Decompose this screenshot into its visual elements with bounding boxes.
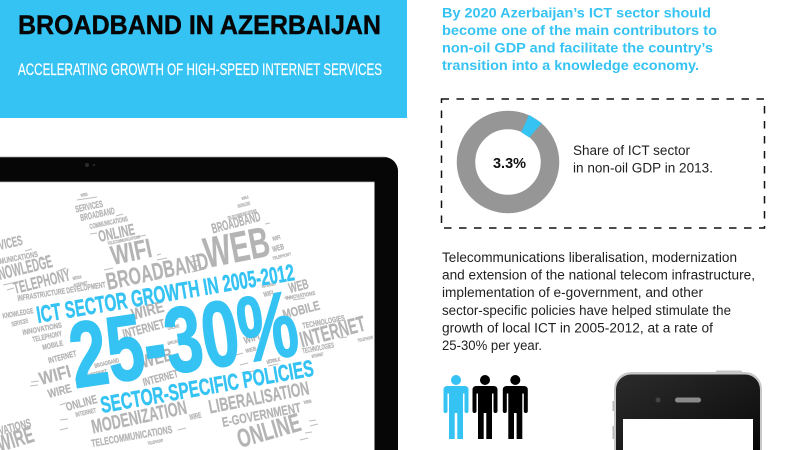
grey word cloud terms: INNOVATIONS xyxy=(22,320,63,337)
body paragraph: and extension of the national telecom infrastructure, xyxy=(442,268,755,282)
intro text: non-oil GDP and facilitate the country’s xyxy=(442,41,713,56)
grey word cloud terms: INTERNET xyxy=(87,369,108,380)
grey word cloud terms: MOBILE xyxy=(41,338,64,352)
grey word cloud terms: TELECOMMUNICATIONS xyxy=(90,424,173,450)
intro text: become one of the main contributors to xyxy=(442,23,717,38)
big number: 25-30%: 25-30% xyxy=(63,271,304,408)
grey word cloud terms: MOBILE xyxy=(281,298,322,322)
body paragraph: Telecommunications liberalisation, modernization xyxy=(442,250,737,265)
grey word cloud terms: MEDIA xyxy=(72,274,82,281)
body paragraph xyxy=(442,250,755,353)
donut value: 3.3% xyxy=(493,155,526,172)
grey word cloud terms: BROADBAND xyxy=(79,206,116,224)
grey word cloud terms: INFRASTRUCTURE DEVELOPMENT xyxy=(17,280,106,303)
grey word cloud terms: SERVICES xyxy=(74,199,104,215)
blue heading: sector-specific policies: SECTOR-SPECIFIC POLICIES xyxy=(98,355,316,418)
grey word cloud terms: BROADBAND xyxy=(210,208,262,236)
blue heading: ICT sector growth: ICT SECTOR GROWTH IN 2005-2012 xyxy=(35,259,296,328)
grey word cloud terms: WIFI xyxy=(108,233,154,271)
body paragraph: implementation of e-government, and other xyxy=(442,285,704,300)
grey word cloud terms: WEB xyxy=(271,242,285,254)
grey word cloud terms: WEB xyxy=(245,346,257,355)
body paragraph: 25-30% per year. xyxy=(442,338,542,353)
grey word cloud terms: TELEPHONY xyxy=(272,251,292,261)
donut caption: in non-oil GDP in 2013. xyxy=(573,161,713,176)
grey word cloud terms: KNOWLEDGE xyxy=(237,201,251,210)
grey word cloud terms: KNOWLEDGE xyxy=(2,306,34,320)
donut caption: Share of ICT sector xyxy=(573,143,690,158)
grey word cloud terms: WEB xyxy=(303,398,313,405)
intro text: transition into a knowledge economy. xyxy=(442,58,699,73)
grey word cloud terms: LIBERALISATION xyxy=(207,378,311,418)
grey word cloud terms: WIRE xyxy=(46,381,73,401)
donut chart xyxy=(466,115,550,204)
grey word cloud terms: ONLINE xyxy=(167,315,179,323)
grey word cloud terms: ONLINE xyxy=(97,222,137,246)
grey word cloud terms: INTERNET xyxy=(75,407,97,419)
body paragraph: sector-specific policies have helped stimulate the xyxy=(442,303,731,318)
grey word cloud terms: TELEPHONY xyxy=(147,438,164,446)
icon: smartphone xyxy=(612,370,762,450)
panel: ICT share xyxy=(442,99,764,228)
grey word cloud terms: WEB xyxy=(200,218,274,278)
grey word cloud terms: WIFI xyxy=(37,361,73,389)
grey word cloud terms: WIFI xyxy=(243,331,261,347)
grey word cloud terms: BROADBAND xyxy=(167,336,190,346)
grey word cloud terms: INTERNET xyxy=(47,348,78,365)
grey word cloud terms xyxy=(0,192,374,450)
grey word cloud terms: WEB xyxy=(80,192,89,198)
grey word cloud terms: WIRE xyxy=(189,411,203,422)
grey word cloud terms: TELECOMMUNICATIONS xyxy=(107,234,140,246)
grey word cloud terms: INTERNET xyxy=(297,311,368,352)
grey word cloud terms: ONLINE xyxy=(64,392,99,414)
icon: three people xyxy=(444,375,528,439)
grey word cloud terms: WIFI xyxy=(263,290,274,299)
grey word cloud terms: WIFI xyxy=(272,235,281,243)
grey word cloud terms: TECHNOLOGIES xyxy=(302,313,346,330)
grey word cloud terms: BROADBAND xyxy=(104,248,211,296)
donut caption xyxy=(573,143,713,176)
grey word cloud terms: TECHNOLOGIES xyxy=(302,341,335,355)
grey word cloud terms: TELECOMMUNICATIONS xyxy=(227,208,258,222)
grey word cloud terms: WEB xyxy=(287,276,310,296)
grey word cloud terms: COMMUNICATIONS xyxy=(89,216,129,231)
intro text: By 2020 Azerbaijan’s ICT sector should xyxy=(442,6,711,20)
grey word cloud terms: MOBILE xyxy=(266,357,282,366)
grey word cloud terms: INTERNET xyxy=(121,316,166,341)
grey word cloud terms: WIRE xyxy=(130,299,166,324)
grey word cloud terms: BROADBAND xyxy=(94,358,120,370)
grey word cloud terms: INTERNET xyxy=(311,352,324,359)
grey word cloud terms: SERVICES xyxy=(11,318,29,328)
body paragraph: growth of local ICT in 2005-2012, at a rate of xyxy=(442,320,713,336)
grey word cloud terms: MODENIZATION xyxy=(89,397,189,438)
grey word cloud terms: INTERNET xyxy=(261,281,277,289)
grey word cloud terms: TELEPHONY xyxy=(357,335,374,343)
word cloud xyxy=(0,192,374,450)
header banner xyxy=(0,0,407,118)
grey word cloud terms: INNOVATIONS xyxy=(285,291,316,302)
grey word cloud terms: INTERNET xyxy=(142,368,180,389)
grey word cloud terms: INTERNET xyxy=(73,280,88,288)
subtitle: ACCELERATING GROWTH OF HIGH-SPEED INTERNET SERVICES xyxy=(18,61,382,79)
title: BROADBAND IN AZERBAIJAN xyxy=(18,10,381,40)
grey word cloud terms: WEB xyxy=(139,344,175,372)
tablet frame xyxy=(0,157,398,450)
grey word cloud terms: E-GOVERNMENT xyxy=(221,400,303,430)
grey word cloud terms: MOBILE xyxy=(241,194,249,201)
grey word cloud terms: TELEPHONY xyxy=(11,265,73,298)
grey word cloud terms: MUNICATIONS xyxy=(0,250,39,266)
intro text xyxy=(442,6,717,73)
grey word cloud terms: TELEPHONY xyxy=(32,329,63,344)
grey word cloud terms: ONLINE xyxy=(167,323,180,331)
